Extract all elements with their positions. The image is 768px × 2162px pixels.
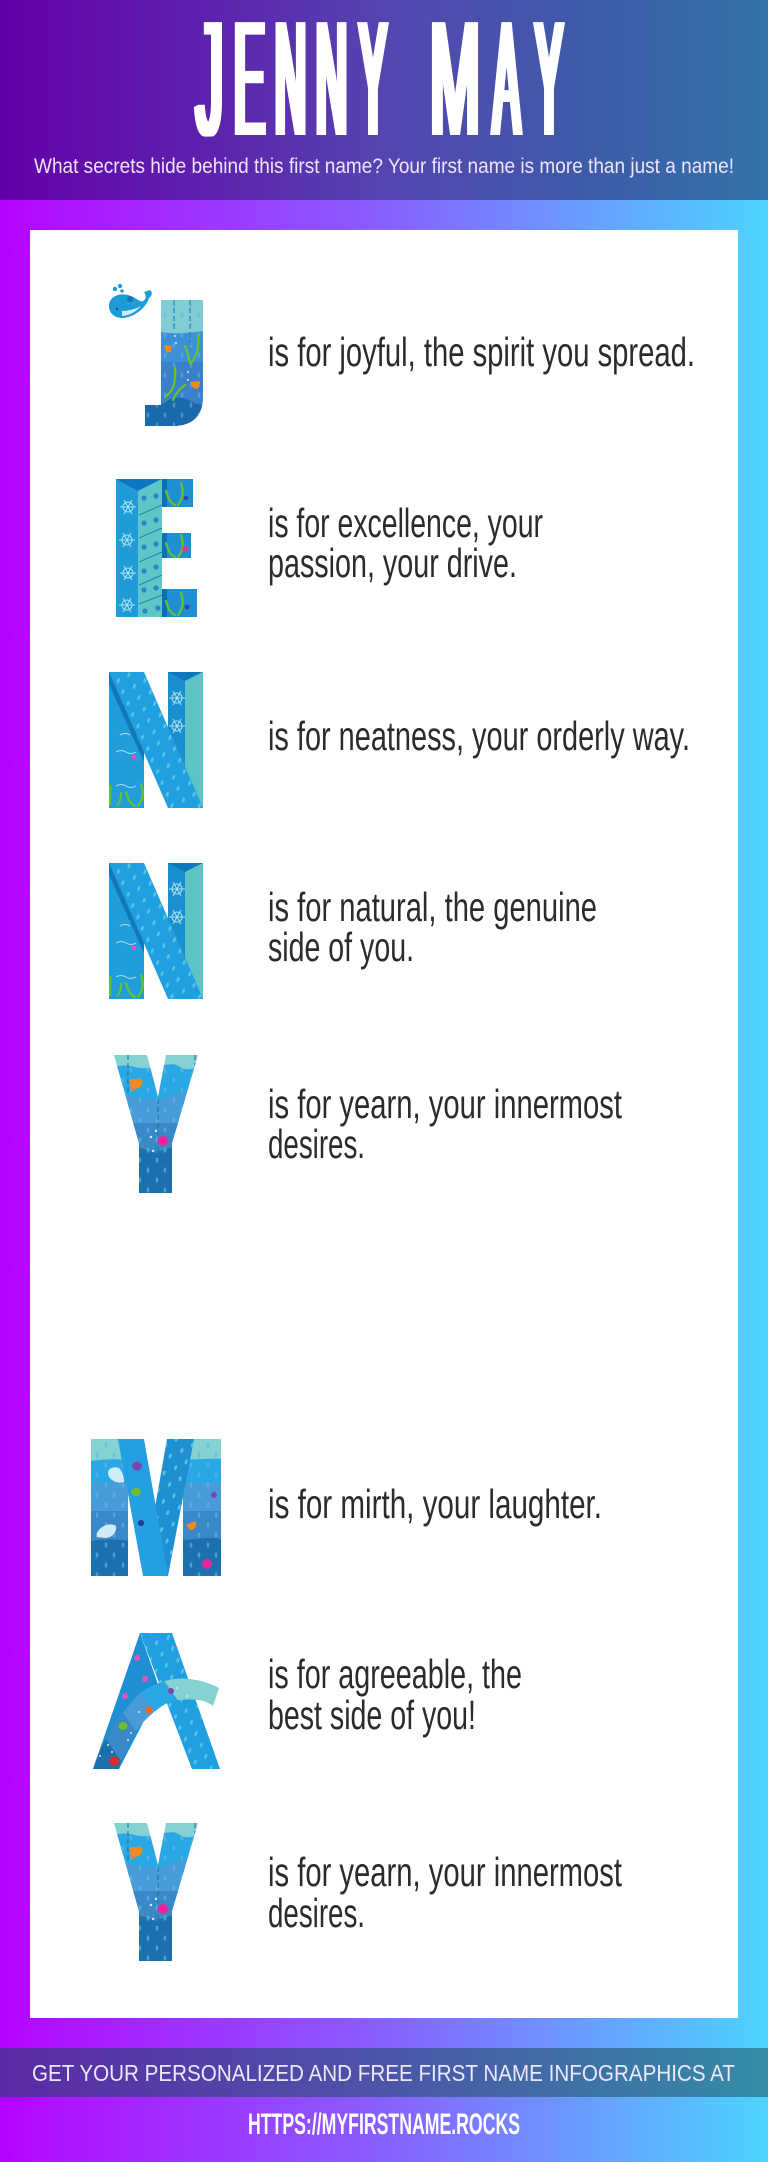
letter Y illustration second — [110, 1823, 202, 1963]
white content panel — [30, 230, 738, 2018]
text: Y second: is for yearn, your innermost — [268, 1849, 622, 1895]
text: M: is for mirth, your laughter. — [268, 1481, 602, 1527]
letter Y illustration — [110, 1055, 202, 1195]
footer url: HTTPS://MYFIRSTNAME.ROCKS — [248, 2108, 520, 2141]
text: N second: is for natural, the genuine — [268, 884, 597, 930]
text: Y second — [268, 1849, 622, 1936]
text: A — [268, 1651, 522, 1738]
text: Y: is for yearn, your innermost — [268, 1081, 622, 1127]
letter A illustration — [93, 1633, 220, 1769]
footer band — [0, 2048, 768, 2097]
text: Y: desires. — [268, 1121, 365, 1167]
header band — [0, 0, 768, 200]
text: Y — [268, 1081, 622, 1167]
icon: whale — [109, 284, 152, 318]
letter N illustration — [109, 672, 203, 808]
text: N second — [268, 884, 597, 970]
text: N second: side of you. — [268, 924, 414, 970]
text: E: is for excellence, your — [268, 500, 543, 546]
letter J illustration — [145, 300, 203, 426]
text: A: is for agreeable, the — [268, 1651, 522, 1697]
letter N illustration second — [109, 863, 203, 999]
text: Y second: desires. — [268, 1890, 365, 1936]
text: A: best side of you! — [268, 1692, 476, 1738]
letter M illustration — [91, 1439, 221, 1576]
text: E: passion, your drive. — [268, 540, 517, 586]
text: E — [268, 500, 543, 586]
letter E illustration — [116, 479, 197, 617]
